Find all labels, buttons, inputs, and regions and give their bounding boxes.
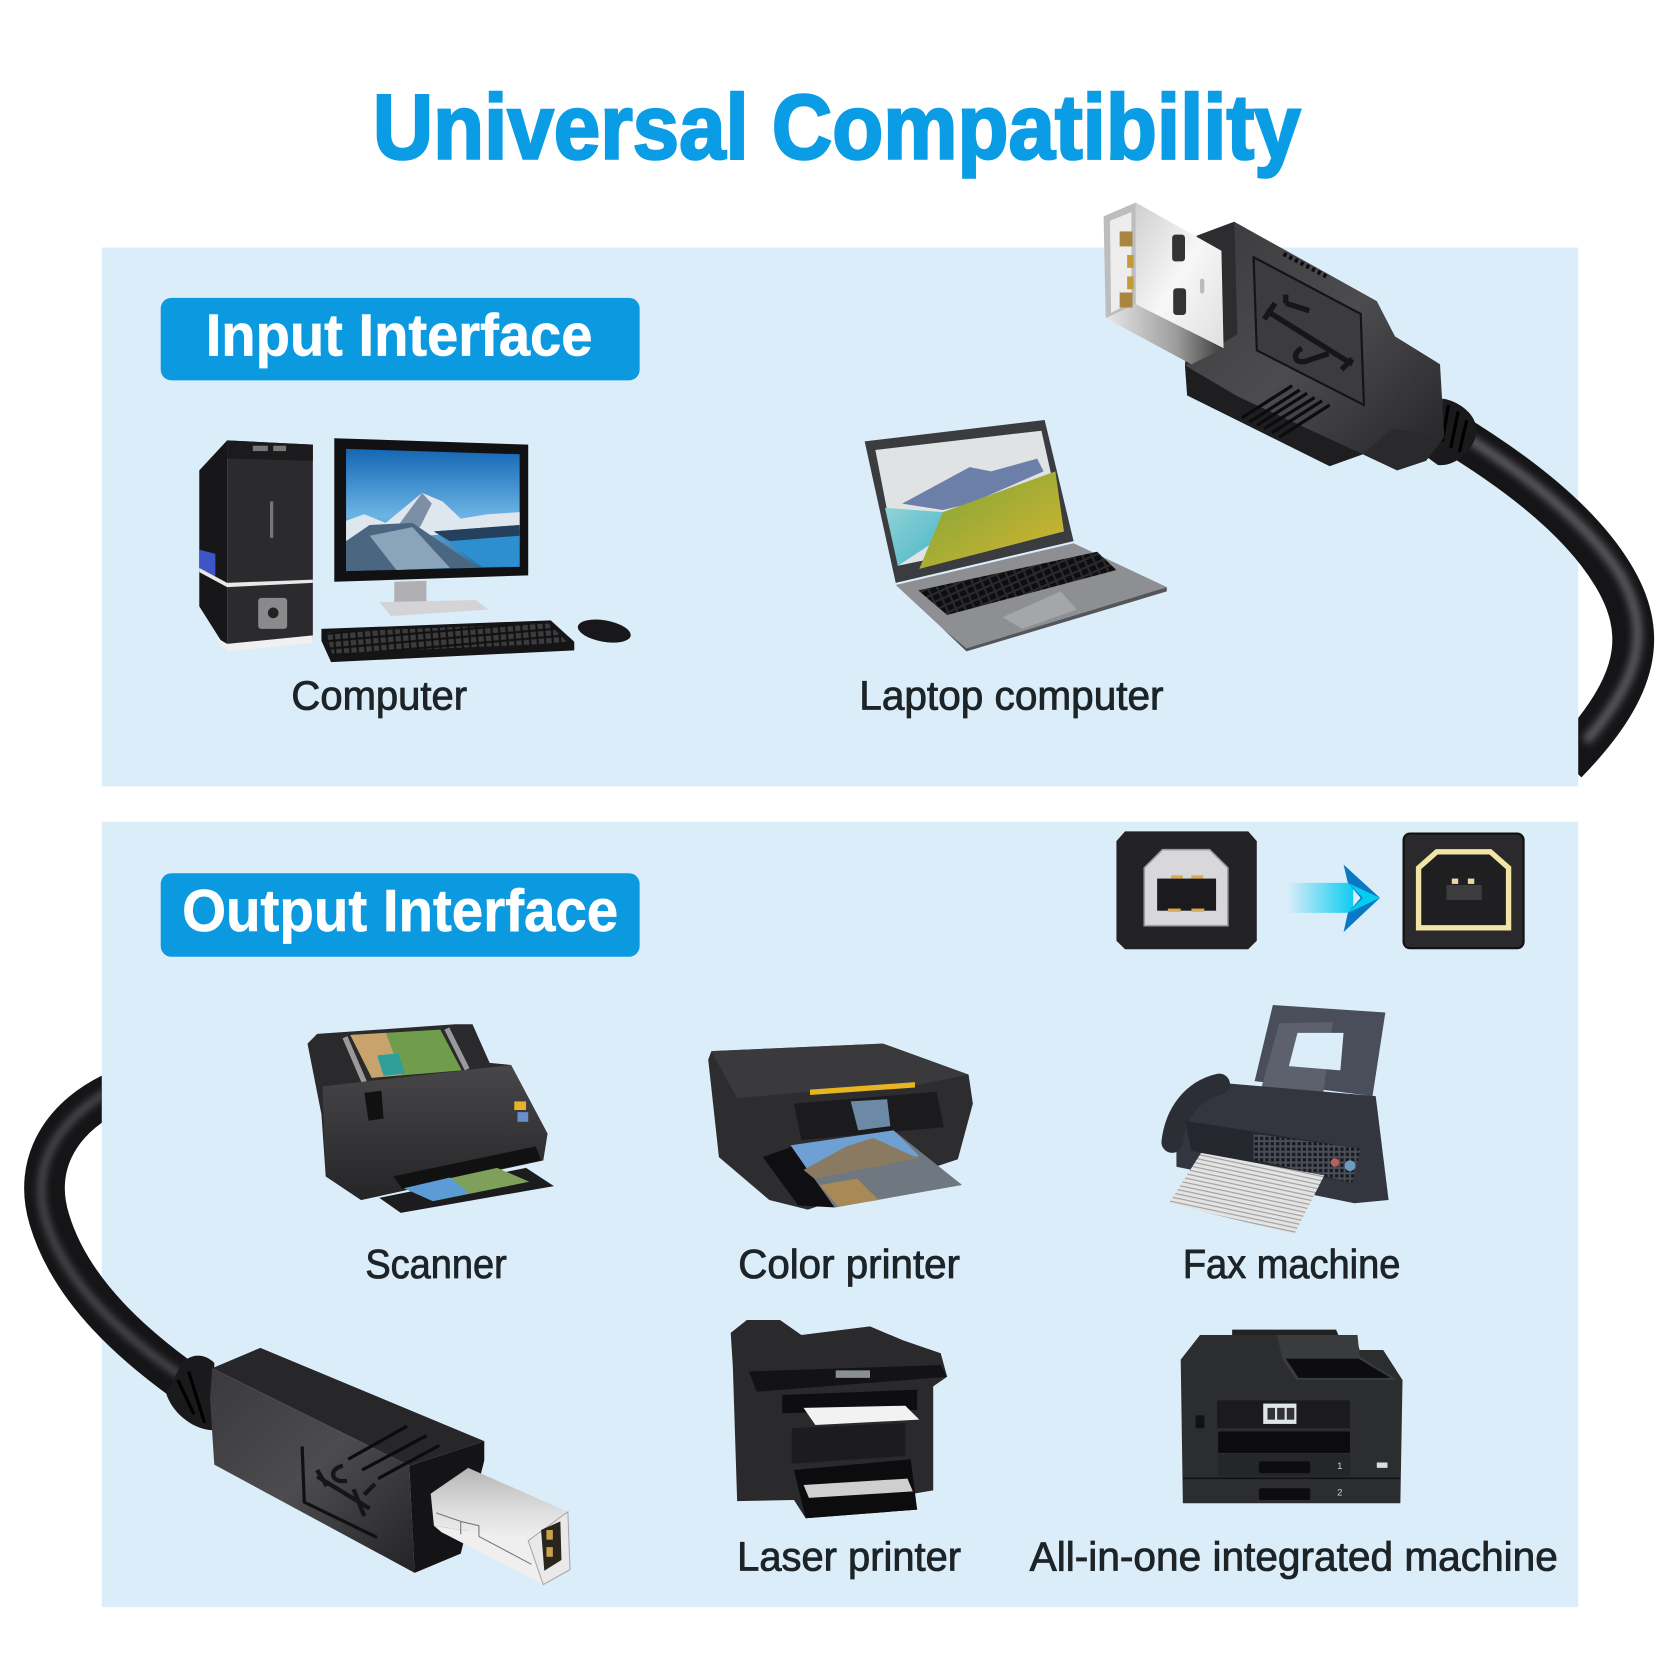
label: all-in-one integrated machine: All-in-one integrated machine [1030, 1534, 1558, 1580]
grip ribs [1242, 386, 1330, 437]
label: laptop computer: Laptop computer [859, 672, 1164, 718]
laptop illustration [865, 420, 1167, 651]
panel: input interface [102, 248, 1578, 786]
strain relief: USB-A [1426, 399, 1477, 465]
monitor [334, 438, 528, 616]
fax machine illustration [1169, 1005, 1389, 1234]
icon: USB-B port end view [1404, 834, 1524, 948]
grip ribs [348, 1426, 439, 1479]
label: laser printer: Laser printer [737, 1534, 961, 1580]
cable: USB-B side [41, 1090, 204, 1395]
all-in-one machine illustration: 2 [1337, 1488, 1343, 1499]
label: color printer: Color printer [738, 1241, 960, 1287]
icon: USB-B plug end view [1116, 831, 1257, 949]
title: Universal Compatibility [373, 76, 1301, 179]
label: fax machine: Fax machine [1183, 1241, 1400, 1287]
connector body: USB-A [1185, 222, 1444, 470]
scanner illustration [308, 1024, 554, 1213]
USB-A cable and connector [1104, 202, 1638, 763]
all-in-one machine illustration [1181, 1330, 1402, 1503]
cable: USB-A side [1449, 431, 1638, 763]
laser printer illustration [731, 1320, 947, 1518]
metal plug: USB-A [1104, 202, 1224, 364]
color printer illustration [708, 1044, 973, 1210]
heading tag: output interface: Output Interface [182, 879, 618, 944]
USB-B cable and connector [41, 1090, 570, 1585]
USB logo recess [302, 1446, 377, 1538]
all-in-one machine illustration: 1 [1337, 1461, 1343, 1472]
heading tag: input interface [161, 298, 640, 380]
USB logo recess [1254, 257, 1364, 405]
metal plug: USB-B [431, 1468, 570, 1585]
connector body: USB-B [210, 1348, 484, 1573]
computer tower [199, 440, 313, 651]
arrow: plug into port [1287, 865, 1380, 932]
desktop computer illustration [199, 438, 633, 662]
strain relief: USB-B [166, 1356, 214, 1430]
panel: output interface [102, 822, 1578, 1607]
keyboard [321, 620, 574, 662]
label: computer: Computer [291, 672, 467, 718]
mouse [576, 616, 633, 646]
heading tag: input interface: Input Interface [206, 304, 592, 369]
label: scanner: Scanner [365, 1241, 507, 1287]
